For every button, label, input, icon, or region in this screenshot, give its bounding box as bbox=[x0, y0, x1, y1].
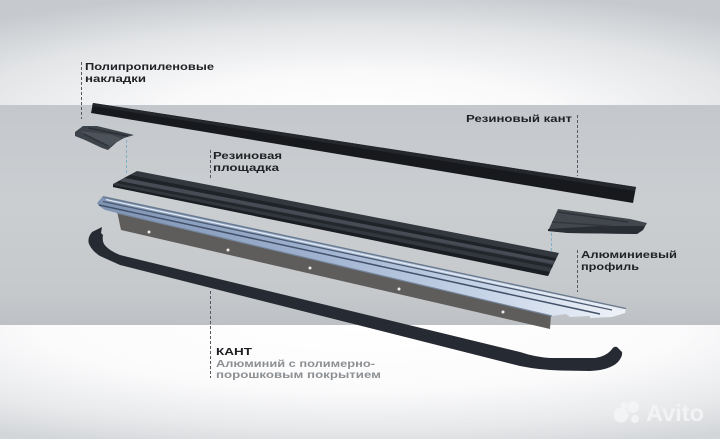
Avito watermark bbox=[614, 400, 704, 426]
leader lines bbox=[82, 62, 578, 378]
label: aluminium profile: Алюминиевый bbox=[581, 249, 677, 261]
profile flange bbox=[117, 211, 551, 329]
label: edging bbox=[216, 346, 381, 381]
label: rubber pad: Резиновая bbox=[213, 150, 282, 162]
label: rubber pad: площадка bbox=[213, 162, 279, 174]
label: edging: КАНТ bbox=[216, 346, 253, 358]
label: polypropylene caps bbox=[85, 61, 214, 85]
label: rubber edge: Резиновый кант bbox=[466, 113, 572, 125]
label: aluminium profile bbox=[581, 249, 677, 273]
background: grey middle band bbox=[0, 105, 720, 325]
label: rubber pad bbox=[213, 150, 282, 174]
right polypropylene cap bbox=[548, 209, 647, 234]
label: polypropylene caps: Полипропиленовые bbox=[85, 61, 214, 73]
rubber step pad bbox=[113, 171, 559, 276]
background: top light area bbox=[0, 0, 720, 105]
aluminium profile bbox=[97, 196, 626, 329]
background: bottom light area bbox=[0, 325, 720, 439]
mounting holes bbox=[148, 230, 504, 314]
profile body bbox=[97, 196, 626, 318]
powder-coated aluminium edging bbox=[88, 227, 622, 371]
profile grooves bbox=[99, 197, 626, 316]
label: aluminium profile: профиль bbox=[581, 261, 640, 273]
left polypropylene cap bbox=[75, 126, 134, 150]
label: edging: порошковым покрытием bbox=[216, 369, 381, 381]
label: edging: Алюминий с полимерно- bbox=[216, 358, 376, 370]
rubber edge strip bbox=[91, 103, 636, 203]
label: polypropylene caps: накладки bbox=[85, 73, 146, 85]
Avito watermark: Avito bbox=[646, 400, 704, 426]
